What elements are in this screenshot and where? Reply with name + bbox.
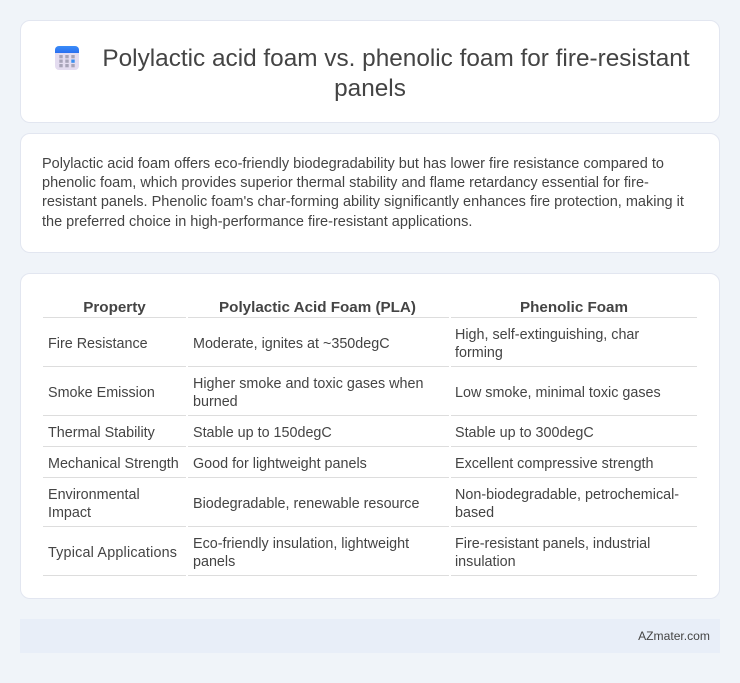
row: mechanical strength <box>43 456 697 478</box>
row: environmental impact: Non-biodegradable, petrochemical- <box>455 487 679 503</box>
row: environmental impact: Impact <box>48 505 91 521</box>
table header <box>43 299 697 318</box>
panel: comparison table <box>20 273 720 599</box>
row: typical applications: Fire-resistant panels, industrial <box>455 536 650 552</box>
row: environmental impact: Biodegradable, renewable resource <box>193 496 419 512</box>
row: smoke emission: Higher smoke and toxic gases when <box>193 376 423 392</box>
row: environmental impact: Environmental <box>48 487 140 503</box>
footer credit: AZmater.com <box>638 629 710 643</box>
summary text: phenolic foam, which provides superior thermal stability and flame retardancy essential for fire- <box>42 175 649 191</box>
summary text <box>42 156 684 230</box>
row: typical applications: insulation <box>455 554 516 570</box>
row: smoke emission: Low smoke, minimal toxic gases <box>455 385 661 401</box>
row: thermal stability: Stable up to 150degC <box>193 425 332 441</box>
row: typical applications <box>43 536 697 576</box>
row: environmental impact: based <box>455 505 494 521</box>
row: thermal stability: Thermal Stability <box>48 425 155 441</box>
row: environmental impact <box>43 487 697 527</box>
table header: Property <box>83 299 146 316</box>
row: smoke emission <box>43 376 697 416</box>
row: smoke emission: Smoke Emission <box>48 385 155 401</box>
footer bar <box>20 619 720 653</box>
row: mechanical strength: Good for lightweight panels <box>193 456 367 472</box>
row: smoke emission: burned <box>193 394 238 410</box>
row: typical applications: panels <box>193 554 235 570</box>
row: fire resistance <box>43 327 697 367</box>
panel: summary <box>20 133 720 253</box>
summary text: the preferred choice in high-performance fire-resistant applications. <box>42 214 472 230</box>
row: typical applications: Typical Applications <box>48 545 177 561</box>
summary text: Polylactic acid foam offers eco-friendly biodegradability but has lower fire resistance compared to <box>42 156 664 172</box>
summary text: resistant panels. Phenolic foam's char-forming ability significantly enhances fire protection, making it <box>42 194 684 210</box>
row: fire resistance: Moderate, ignites at ~350degC <box>193 336 390 352</box>
row: thermal stability <box>43 425 697 447</box>
table header: Polylactic Acid Foam (PLA) <box>219 299 416 316</box>
row: typical applications: Eco-friendly insulation, lightweight <box>193 536 409 552</box>
title: panels <box>334 75 406 102</box>
row: mechanical strength: Mechanical Strength <box>48 456 179 472</box>
table header: Phenolic Foam <box>520 299 628 316</box>
icon: calendar <box>55 46 79 70</box>
row: fire resistance: Fire Resistance <box>48 336 148 352</box>
row: fire resistance: High, self-extinguishing, char <box>455 327 639 343</box>
panel: title card <box>20 20 720 123</box>
row: thermal stability: Stable up to 300degC <box>455 425 594 441</box>
title <box>102 45 690 102</box>
row: fire resistance: forming <box>455 345 503 361</box>
row: mechanical strength: Excellent compressive strength <box>455 456 654 472</box>
title: Polylactic acid foam vs. phenolic foam for fire-resistant <box>102 45 690 72</box>
